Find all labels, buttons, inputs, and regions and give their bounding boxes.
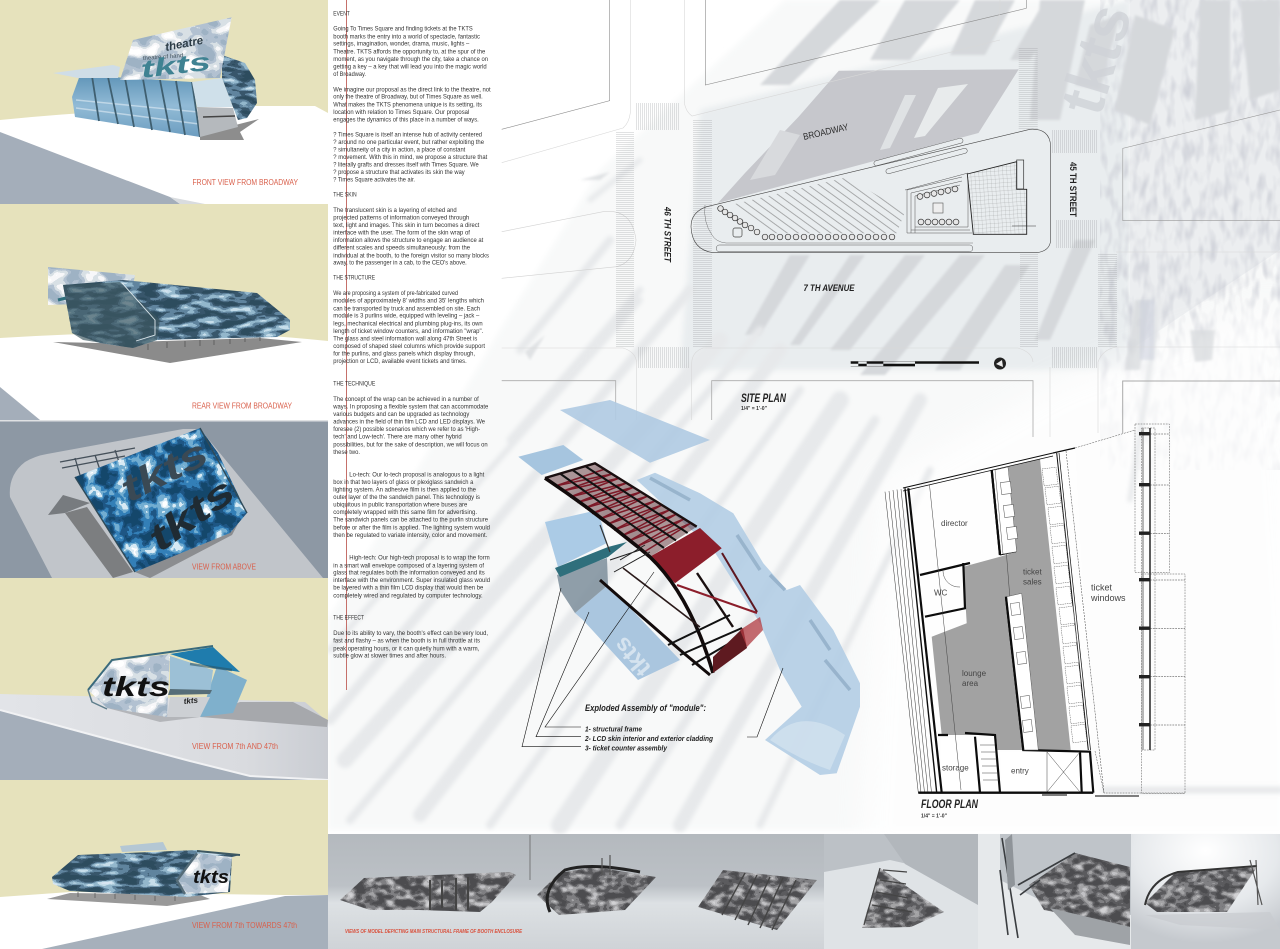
booth skin — [52, 850, 240, 897]
panel: view from 7th and 47th: tkts — [102, 671, 170, 702]
text block: event: moment, as you navigate through the city, take a chance on — [333, 56, 488, 63]
booth glass front — [72, 75, 200, 137]
site plan — [691, 129, 1051, 253]
text block: the structure: composed of shaped steel columns which provide support — [333, 343, 485, 350]
text block: the skin: information allows the structure to engage an audience at — [333, 237, 483, 244]
text block: the skin: projected patterns of information conveyed through — [333, 215, 470, 222]
text block: the skin: away, to the passenger in a cab, to the CEO's above. — [333, 260, 467, 267]
text block: the skin: different scales and speeds simultaneously: from the — [333, 245, 470, 252]
room labels: ticket — [1091, 582, 1113, 592]
label: 7 TH Avenue: 7 TH AVENUE — [804, 282, 855, 293]
site outline — [691, 129, 1051, 253]
text block: event: ? simultaneity of a city in action, a place of constant — [333, 147, 465, 154]
text block: the skin: The translucent skin is a layering of etched and — [333, 207, 457, 214]
text block: the structure: length of ticket window counters, and information "wrap". — [333, 328, 483, 335]
heading: floor plan: FLOOR PLAN — [921, 799, 979, 811]
heading: site plan — [741, 393, 787, 412]
panel: view from 7th towards 47th — [0, 780, 328, 949]
text block: the skin — [333, 192, 490, 267]
legs — [78, 892, 175, 901]
text block: the technique: before or after the film is applied. The lighting system would — [333, 524, 490, 531]
thick walls — [903, 448, 1093, 793]
text block: event: ? Times Square activates the air. — [333, 177, 415, 184]
caption: VIEW FROM 7th TOWARDS 47th — [192, 921, 297, 930]
photo strip: model views — [328, 834, 1280, 949]
room labels: ticket — [1023, 568, 1042, 576]
roof canopy shadow — [48, 495, 90, 515]
floor plan — [885, 448, 1139, 796]
label: Broadway: BROADWAY — [802, 121, 850, 142]
gray floor — [932, 459, 1071, 750]
text block: the technique: be layered with a thin film LCD display that would then be — [333, 585, 484, 592]
text block: event: location with relation to Times Square. Our proposal — [333, 109, 470, 116]
curb strip — [716, 245, 973, 252]
heading: floor plan — [921, 799, 979, 820]
fins — [60, 448, 135, 475]
panel: view from 7th towards 47th: tkts — [193, 867, 229, 887]
exploded assembly legend: Exploded Assembly of "module": — [585, 703, 706, 713]
long stripes at Broadway side — [873, 138, 972, 233]
elevation of ticket windows — [1075, 424, 1185, 793]
text block: the structure: can be transported by truck and assembled on site. Each — [333, 305, 480, 312]
text block: the skin: text, light and images. This skin in turn becomes a direct — [333, 222, 479, 229]
booth footprint — [967, 162, 1027, 234]
heading: floor plan: 1/4" = 1'-0" — [921, 814, 948, 820]
room labels: director — [941, 519, 968, 528]
skin sheet: right curved — [637, 473, 860, 775]
text block: the technique: THE TECHNIQUE — [333, 381, 376, 388]
text block: the skin: THE SKIN — [333, 192, 357, 199]
text block: the structure: legs, mechanical electrical and plumbing plug-ins, its own — [333, 320, 483, 327]
photo 6 — [1131, 834, 1280, 949]
panel: view from above: tkts — [141, 470, 243, 560]
caption: VIEW FROM ABOVE — [192, 562, 256, 572]
ticket window bays — [1042, 467, 1087, 743]
door bars — [1042, 795, 1139, 796]
text block: the technique: completely wired and regulated by computer technology. — [333, 592, 483, 599]
shadow — [53, 338, 302, 363]
room labels: lounge — [962, 669, 987, 678]
text block: the effect: subtle glow at slower times and after hours. — [333, 653, 446, 660]
text block: the effect: THE EFFECT — [333, 615, 364, 622]
caption: VIEW FROM 7th AND 47th — [192, 742, 278, 751]
text block: event: ? propose a structure that activates its skin the way — [333, 169, 465, 176]
room labels: area — [962, 679, 979, 688]
text block: the technique: possibilities, but for the sake of description, we will focus on — [333, 441, 488, 448]
room labels: storage — [942, 764, 969, 772]
end fin — [200, 666, 247, 717]
panel: front view from Broadway — [0, 0, 328, 204]
text block: event: engages the dynamics of this place in a number of ways. — [333, 116, 479, 123]
left canopy — [53, 65, 120, 78]
room labels: WC — [934, 588, 948, 598]
heading: site plan: 1/4" = 1'-0" — [741, 406, 768, 412]
exploded assembly legend: 2- LCD skin interior and exterior cladding — [584, 736, 714, 743]
legs — [148, 337, 260, 350]
text block: the effect: peak operating hours, or it can quietly hum with a warm, — [333, 645, 479, 652]
text block: the technique: The sandwich panels can be attached to the purlin structure — [333, 517, 488, 524]
photo 5 — [978, 834, 1131, 949]
text block: the technique: High-tech: Our high-tech proposal is to wrap the form — [349, 555, 490, 562]
text block: the technique: box in that two layers of glass or plexiglass sandwich a — [333, 479, 474, 486]
skin panel: left back — [545, 510, 607, 567]
text block: the technique — [332, 381, 490, 599]
panel: rear view from Broadway — [0, 204, 328, 420]
panel: front view from Broadway: theatre of hand — [143, 53, 183, 62]
text block: the structure: projection or LCD, available event tickets and times. — [333, 358, 467, 365]
text block: the technique: lighting system. An adhesive film is then applied to the — [333, 487, 476, 494]
panel: front view from Broadway: tkts — [139, 48, 212, 84]
room labels: windows — [1090, 593, 1126, 603]
room labels: entry — [1011, 766, 1029, 776]
label: 45 TH Street: 45 TH STREET — [1068, 162, 1079, 217]
end panel — [63, 282, 160, 348]
text block: the technique: tech' and Low-tech'. There are many other hybrid — [333, 434, 462, 441]
text column: project description — [332, 11, 491, 660]
white end with logo — [177, 854, 232, 894]
side — [170, 656, 213, 693]
text block: event: ? literally grafts and dresses itself with Times Square. We — [333, 162, 479, 169]
counter wall redraw — [992, 470, 1023, 750]
text block: the technique: completely wrapped with this same film for advertising. — [333, 509, 477, 516]
text block: event: settings, imagination, wonder, drama, music, lights – — [333, 41, 470, 48]
text block: the technique: advances in the field of thin film LCD and LED displays. We — [333, 419, 485, 426]
text block: the structure: module is 3 purlins wide, equipped with leveling – jack – — [333, 313, 480, 320]
text block: the structure: modules of approximately 8' widths and 35' lengths which — [333, 298, 484, 305]
text block: event: getting a key – a key that will lead you into the magic world — [333, 63, 487, 70]
caption: VIEWS OF MODEL DEPICTING MAIN STRUCTURAL FRAME OF BOOTH ENCLOSURE — [345, 929, 522, 935]
exploded assembly legend — [584, 703, 714, 752]
road: Broadway grey area — [718, 69, 1019, 203]
skin panel: small roof — [518, 445, 583, 475]
text block: the technique: in a smart wall envelope composed of a layering system of — [333, 562, 484, 569]
photo 4 — [824, 834, 978, 949]
text block: event: Going To Times Square and finding tickets at the TKTS — [333, 26, 473, 33]
street block outlines — [502, 0, 1280, 437]
text block: event — [333, 11, 491, 184]
exploded assembly legend: 3- ticket counter assembly — [585, 746, 668, 752]
heading: site plan: SITE PLAN — [741, 393, 787, 405]
text block: event: EVENT — [333, 11, 350, 18]
roof sign — [120, 842, 167, 852]
panel: view from above — [0, 420, 328, 578]
skin sheet: left lower — [575, 585, 680, 680]
label: 46 TH Street: 46 TH STREET — [662, 206, 674, 263]
room labels — [934, 519, 1126, 776]
text block: the technique: outer layer of the the sandwich panel. This technology is — [333, 494, 481, 501]
text block: the technique: then be regulated to variate intensity, color and movement. — [333, 532, 487, 539]
leader lines — [522, 572, 783, 747]
text block: the structure: We are proposing a system of pre-fabricated curved — [333, 290, 458, 297]
text block: event: ? Times Square is itself an intense hub of activity centered — [333, 131, 482, 138]
text block: the technique: ways. In proposing a flexible system that can accommodate — [332, 403, 489, 410]
text block: event: ? around no one particular event, but rather exploiting the — [333, 139, 484, 146]
red vertical rule — [346, 0, 348, 690]
text block: the structure: The glass and steel information wall along 47th Street is — [333, 335, 478, 342]
ticket counter assembly — [557, 558, 608, 613]
text block: the structure: THE STRUCTURE — [333, 275, 375, 282]
exploded assembly legend: 1- structural frame — [585, 726, 642, 734]
booth body camouflage skin — [63, 280, 290, 348]
text block: the effect: Due to its ability to vary, the booth's effect can be very loud, — [333, 630, 488, 637]
shadow — [200, 702, 328, 727]
diagonal paving stripes — [735, 177, 905, 233]
skin panel: roof — [560, 400, 710, 463]
booth skin — [75, 428, 247, 572]
sign panel — [120, 17, 232, 80]
text block: the technique: foresee (2) possible scenarios which we refer to as 'High- — [333, 426, 480, 433]
text block: event: What makes the TKTS phenomena unique is its setting, its — [333, 101, 483, 108]
diagram: exploded assembly of module — [518, 400, 860, 775]
diagram: exploded assembly of module: tkts — [608, 631, 657, 681]
caption: REAR VIEW FROM BROADWAY — [192, 402, 293, 410]
text block: event: booth marks the entry into a world of spectacle, fantastic — [333, 33, 481, 40]
text block: the structure — [333, 275, 485, 365]
panel: view from 7th and 47th: tkts — [183, 695, 199, 706]
booth end wall — [192, 78, 233, 107]
text block: event: ? movement. With this in mind, we propose a structure that — [333, 154, 487, 161]
text block: the technique: ubiquitous in public transportation where buses are — [333, 502, 468, 509]
block planters — [718, 186, 959, 240]
white face — [88, 654, 170, 717]
text block: the skin: interface with the user. The form of the skin wrap of — [333, 230, 470, 237]
text block: the effect: fast and flashy – as when the booth is in full throttle at its — [333, 638, 481, 645]
background: blurred Times Square streak photo — [328, 0, 1280, 860]
booth dark skin — [222, 55, 257, 120]
crosswalk hatching — [616, 47, 1117, 368]
text block: event: of Broadway. — [333, 71, 366, 78]
text block: the skin: individual at the booth, to the foreign visitor so many blocks — [333, 252, 490, 259]
panel: view from 7th and 47th — [0, 578, 328, 780]
facade hatch — [885, 489, 932, 793]
sign behind booth — [48, 267, 135, 305]
kiosk icons — [733, 228, 742, 237]
shadow — [47, 893, 210, 906]
text block: event: only the theatre of Broadway, but of Times Square as well. — [333, 94, 483, 101]
scale bar — [851, 362, 979, 366]
text block: the technique: The concept of the wrap can be achieved in a number of — [333, 396, 479, 403]
text block: the technique: various budgets and can be upgraded as technology — [333, 411, 470, 418]
text block: the structure: for the purlins, and glass panels which display through, — [333, 351, 475, 358]
white base rooms — [885, 448, 1094, 793]
photo 3 — [672, 834, 824, 949]
caption: FRONT VIEW FROM BROADWAY — [192, 178, 299, 187]
text block: event: We imagine our proposal as the direct link to the theatre, not — [333, 86, 491, 93]
text block: the technique: Lo-tech: Our lo-tech proposal is analogous to a light — [349, 471, 484, 478]
text block: event: Theatre. TKTS affords the opportunity to, at the spur of the — [333, 48, 486, 55]
counter desks — [995, 467, 1038, 750]
text block: the technique: glass that regulates both the information conveyed and its — [333, 570, 485, 577]
booth shadow — [200, 119, 259, 140]
panel: view from above: tkts — [114, 432, 215, 511]
structural frame — [545, 463, 763, 675]
photo 1 — [328, 834, 518, 949]
faint big tkts lettering in the photo: tkts — [1047, 0, 1146, 122]
text block: the technique: these two. — [333, 449, 360, 456]
icon: north arrow — [994, 358, 1006, 370]
text block: the effect — [333, 615, 488, 660]
text block: the technique: interface with the environment. Super insulated glass would — [333, 577, 490, 584]
photo 2 — [518, 834, 672, 949]
room labels: sales — [1023, 578, 1042, 586]
panel: front view from Broadway: theatre — [164, 35, 205, 54]
